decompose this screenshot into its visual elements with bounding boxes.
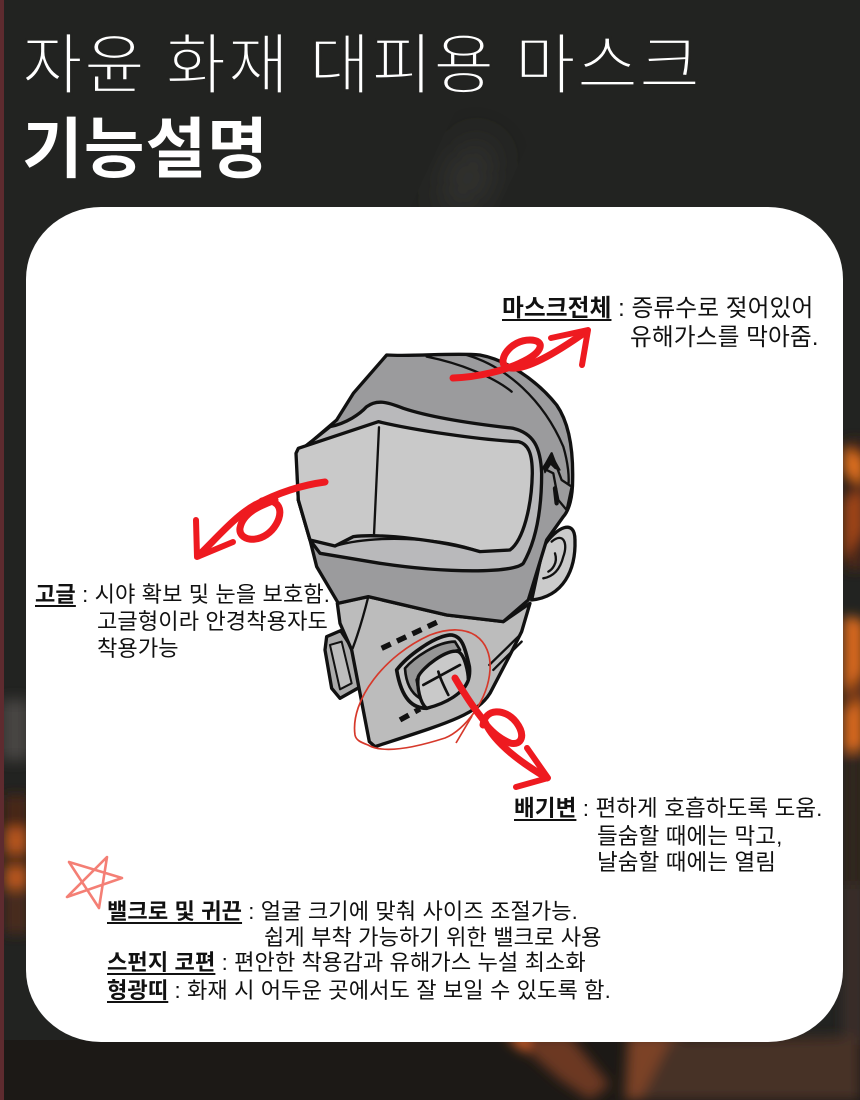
hood [297, 354, 573, 622]
strap buckle [543, 453, 572, 510]
goggle details [335, 427, 480, 552]
text: velcro line 2: 쉽게 부착 가능하기 위한 밸크로 사용 [264, 925, 602, 950]
text: goggle line 2: 고글형이라 안경착용자도 [97, 609, 328, 634]
exhaust valve [397, 635, 470, 708]
stitching dashes [382, 622, 438, 720]
label: valve: 배기변 : 편하게 호흡하도록 도움. [514, 796, 823, 821]
lower mask [337, 597, 530, 747]
feature: reflective band: 형광띠 : 화재 시 어두운 곳에서도 잘 보일 수 있도록 함. [107, 978, 611, 1003]
ear [532, 527, 575, 600]
label: whole mask: 마스크전체 : 증류수로 젖어있어 [502, 296, 813, 322]
feature: sponge: 스펀지 코편 : 편안한 착용감과 유해가스 누설 최소화 [107, 950, 586, 975]
title line 1: 자윤 화재 대피용 마스크 [22, 28, 701, 102]
hood seams [427, 355, 569, 490]
text: valve line 3: 날숨할 때에는 열림 [597, 850, 776, 875]
goggle lens [296, 422, 532, 552]
title line 2: 기능설명 [22, 112, 269, 186]
label: goggle: 고글 : 시야 확보 및 눈을 보호함. [35, 582, 330, 607]
panel: white card [26, 207, 843, 1042]
text: valve line 2: 들숨할 때에는 막고, [597, 824, 782, 849]
mask fold [353, 597, 368, 648]
goggle frame [297, 402, 542, 571]
side cushion [325, 631, 361, 698]
text: whole mask line 2: 유해가스를 막아줌. [630, 325, 819, 351]
head strap [489, 635, 522, 670]
text: goggle line 3: 착용가능 [97, 636, 179, 661]
feature: velcro and ear straps: 밸크로 및 귀끈 : 얼굴 크기에 맞춰 사이즈 조절가능. [107, 899, 578, 924]
